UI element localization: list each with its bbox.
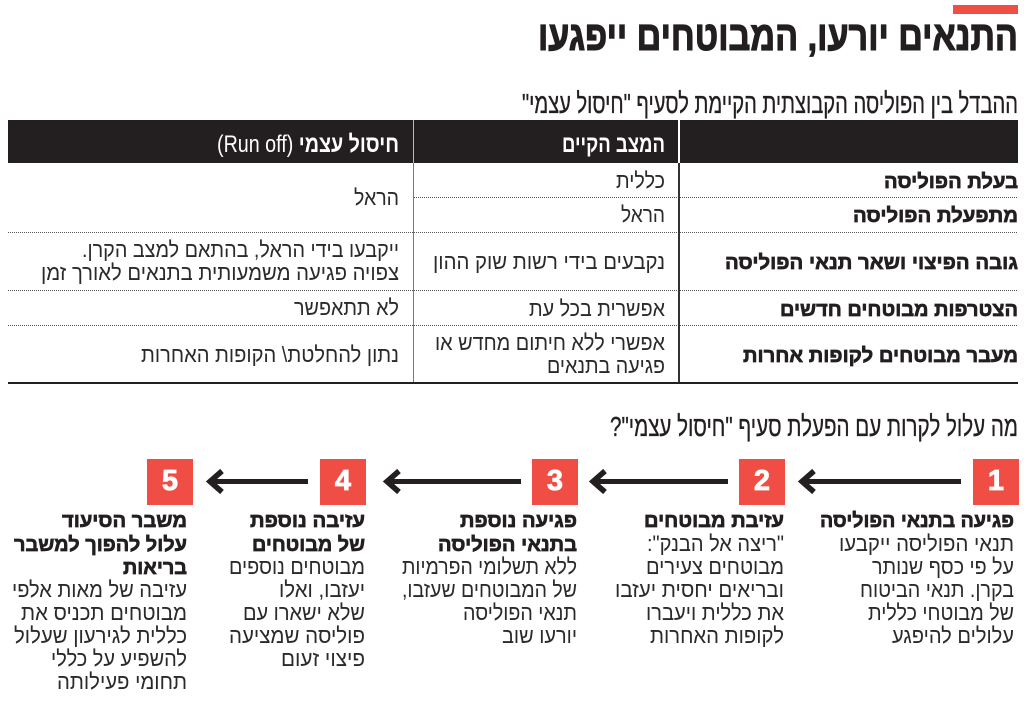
step 4 text: פוליסה שמציעה xyxy=(229,623,365,648)
column: run off: ייקבעו בידי הראל, בהתאם למצב הקרן. xyxy=(82,237,399,262)
step 2 text: "ריצה אל הבנק": xyxy=(647,531,784,556)
column: current state: אפשרית בכל עת xyxy=(529,296,665,321)
step 5 number xyxy=(147,459,193,505)
step 1 text xyxy=(820,510,1014,648)
step 4 text: של מבוטחים xyxy=(252,534,365,556)
step 5 text xyxy=(12,510,187,694)
step 4 text: שלא ישארו עם xyxy=(243,600,365,625)
step 3 number: 3 xyxy=(547,465,563,497)
step 4 text: יעזבו, ואלו xyxy=(279,577,365,602)
step 2 text: לקופות האחרות xyxy=(650,623,784,648)
step 4 number xyxy=(320,459,366,505)
step 2 text: ובריאים יחסית יעזבו xyxy=(615,577,784,602)
column: current state xyxy=(433,168,665,378)
step 4 text xyxy=(229,510,365,671)
step 1 text: תנאי הפוליסה ייקבעו xyxy=(839,531,1014,556)
row labels: גובה הפיצוי ושאר תנאי הפוליסה xyxy=(725,252,1018,274)
column: current state: הראל xyxy=(621,202,665,227)
step 2 text: עזיבת מבוטחים xyxy=(644,510,784,532)
row labels: מתפעלת הפוליסה xyxy=(853,205,1018,227)
table header bar: חיסול עצמי (Run off) xyxy=(217,131,399,158)
column: current state: נקבעים בידי רשות שוק ההון xyxy=(433,249,665,274)
step 3 text: של המבוטחים שעזבו, xyxy=(402,577,577,602)
step 3 text: בתנאי הפוליסה xyxy=(438,534,577,556)
step 1 text: עלולים להיפגע xyxy=(892,623,1014,648)
row labels: בעלת הפוליסה xyxy=(884,171,1018,193)
step 4 text: פיצוי זעום xyxy=(281,646,365,671)
step 1 text: פגיעה בתנאי הפוליסה xyxy=(820,510,1014,532)
step 3 text xyxy=(402,510,577,648)
step 5 text: בריאות xyxy=(123,557,187,579)
step 4 text: מבוטחים נוספים xyxy=(229,554,365,579)
step 2 text: את כללית ויעברו xyxy=(646,600,784,625)
step 4 text: עזיבה נוספת xyxy=(250,510,365,532)
step 3 text: תנאי הפוליסה xyxy=(463,600,577,625)
step 5 text: מבוטחים תכניס את xyxy=(21,600,187,625)
step 4 number: 4 xyxy=(335,465,351,497)
step 3 text: פגיעה נוספת xyxy=(460,510,577,532)
arrow 1 to 2 xyxy=(802,471,961,492)
column: run off xyxy=(41,185,399,367)
column: run off: צפויה פגיעה משמעותית בתנאים לאורך זמן xyxy=(41,260,399,285)
table header bar xyxy=(8,120,1018,163)
step 5 number: 5 xyxy=(162,465,178,497)
column: run off: הראל xyxy=(354,185,399,210)
step 2 number: 2 xyxy=(754,465,770,497)
table header bar: המצב הקיים xyxy=(562,131,665,158)
comparison table xyxy=(8,120,1018,384)
column: run off: נתון להחלטת\ הקופות האחרות xyxy=(141,342,399,367)
step 3 text: ללא תשלומי הפרמיות xyxy=(402,554,577,579)
step 3 text: יורעו שוב xyxy=(502,623,577,648)
arrow 4 to 5 xyxy=(210,471,308,492)
row labels: מעבר מבוטחים לקופות אחרות xyxy=(743,345,1018,367)
step 5 text: עלול להפוך למשבר xyxy=(14,534,187,556)
step 2 text xyxy=(615,510,784,648)
step 2 text: מבוטחים צעירים xyxy=(646,554,784,579)
step 1 number xyxy=(973,459,1019,505)
step 5 text: עזיבה של מאות אלפי xyxy=(12,577,187,602)
accent bar xyxy=(953,5,1018,14)
row labels: הצטרפות מבוטחים חדשים xyxy=(780,299,1018,321)
column: current state: פגיעה בתנאים xyxy=(547,353,665,378)
arrow 3 to 4 xyxy=(387,471,521,492)
arrow 2 to 3 xyxy=(593,471,728,492)
column: current state: כללית xyxy=(616,168,665,193)
step 3 number xyxy=(532,459,578,505)
row labels xyxy=(725,171,1018,367)
column: current state: אפשרי ללא חיתום מחדש או xyxy=(435,330,665,355)
step 5 text: כללית לגירעון שעלול xyxy=(14,623,187,648)
column: run off: לא תתאפשר xyxy=(294,295,399,320)
step 5 text: להשפיע על כללי xyxy=(51,646,187,671)
step 2 number xyxy=(739,459,785,505)
step 5 text: תחומי פעילותה xyxy=(57,669,187,694)
step 5 text: משבר הסיעוד xyxy=(62,510,187,532)
step 1 number: 1 xyxy=(988,465,1004,497)
